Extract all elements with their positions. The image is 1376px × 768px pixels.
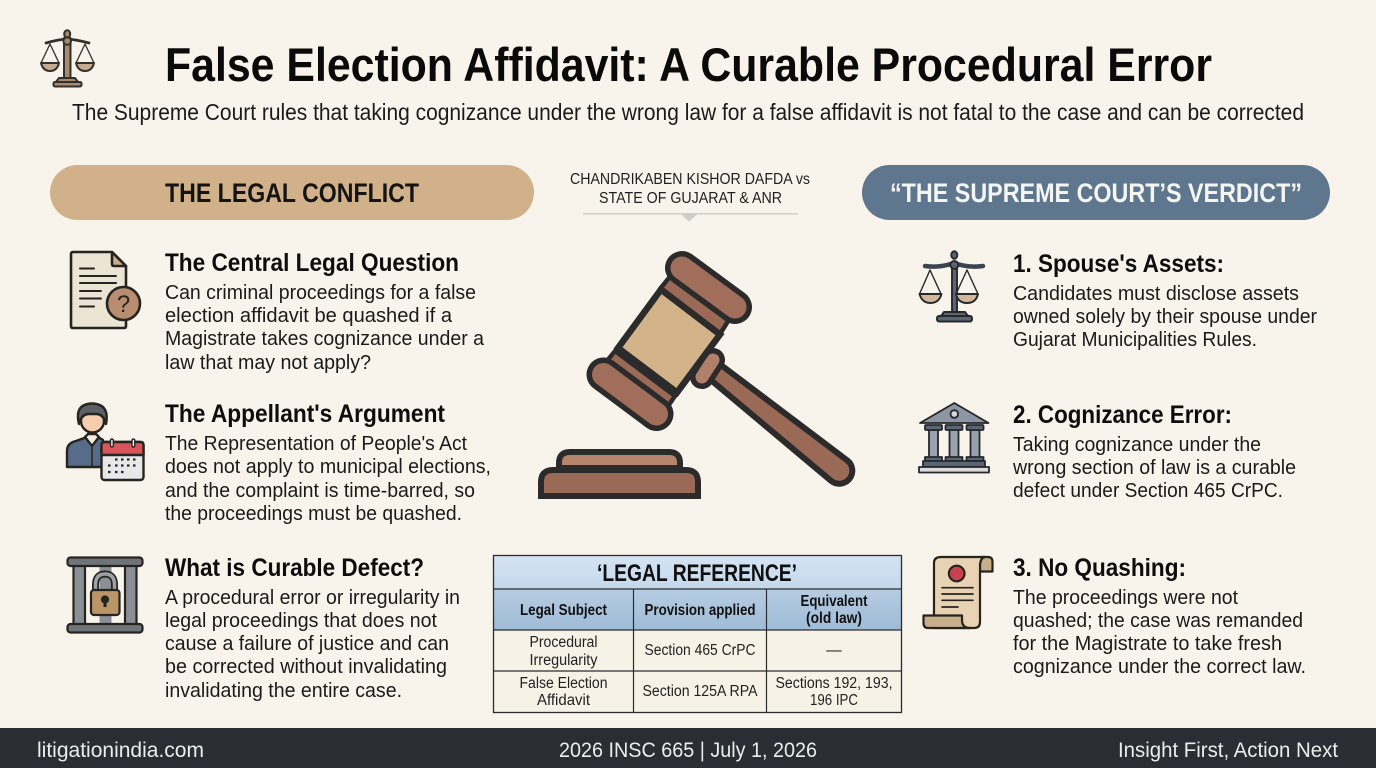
panel: right column xyxy=(919,250,1317,678)
table row: procedural irregularity: Irregularity xyxy=(530,652,598,669)
text: cognizance error: 2. Cognizance Error: xyxy=(1013,401,1232,429)
table row: false election affidavit: Affidavit xyxy=(537,692,591,709)
table row: procedural irregularity: Section 465 CrPC xyxy=(644,642,756,659)
text: what is curable defect: be corrected without invalidating xyxy=(165,656,447,678)
text: the appellant's argument: and the complaint is time-barred, so xyxy=(165,480,475,502)
footer bar xyxy=(0,728,1376,768)
case name xyxy=(570,171,810,222)
table header row xyxy=(520,593,868,627)
table header row: Provision applied xyxy=(644,602,756,619)
sound block xyxy=(559,452,680,468)
table row: procedural irregularity: Procedural xyxy=(530,634,598,651)
text: the appellant's argument: does not apply to municipal elections, xyxy=(165,456,491,478)
icon: court building xyxy=(919,403,989,472)
text: no quashing: cognizance under the correct law. xyxy=(1013,656,1306,678)
text: what is curable defect: invalidating the entire case. xyxy=(165,680,402,702)
table row: false election affidavit: 196 IPC xyxy=(810,692,858,709)
panel heading: the supreme court's verdict: “THE SUPREME COURT’S VERDICT” xyxy=(890,178,1302,208)
icon: document with question mark xyxy=(71,252,140,328)
collar xyxy=(702,360,713,377)
icon: header scales xyxy=(41,30,94,86)
text: cognizance error xyxy=(1012,401,1296,502)
table row: false election affidavit xyxy=(520,675,892,709)
text: spouse's assets: Gujarat Municipalities Rules. xyxy=(1013,329,1257,351)
case name: STATE OF GUJARAT & ANR xyxy=(599,190,782,207)
text: cognizance error: wrong section of law is a curable xyxy=(1012,457,1296,479)
icon: document with question mark: ? xyxy=(117,291,130,318)
text: what is curable defect: legal proceedings that does not xyxy=(165,610,437,632)
text: what is curable defect xyxy=(165,554,460,702)
footer bar: litigationindia.com xyxy=(37,739,204,762)
text: cognizance error: Taking cognizance under the xyxy=(1013,434,1261,456)
text: the central legal question: Can criminal proceedings for a false xyxy=(165,282,476,304)
table header row: (old law) xyxy=(806,610,862,627)
text: the appellant's argument: the proceedings must be quashed. xyxy=(165,503,462,525)
title: False Election Affidavit: A Curable Procedural Error xyxy=(165,38,1212,91)
text: the appellant's argument: The Representation of People's Act xyxy=(165,433,467,455)
text: the central legal question: Magistrate takes cognizance under a xyxy=(165,328,485,350)
text: cognizance error: defect under Section 465 CrPC. xyxy=(1013,480,1283,502)
case name: CHANDRIKABEN KISHOR DAFDA vs xyxy=(570,171,810,188)
text: no quashing: quashed; the case was remanded xyxy=(1013,610,1303,632)
text: no quashing: The proceedings were not xyxy=(1013,587,1238,609)
icon: scales of justice xyxy=(920,251,983,322)
table row: procedural irregularity: — xyxy=(826,642,842,659)
text: spouse's assets xyxy=(1013,250,1317,351)
text: what is curable defect: cause a failure of justice and can xyxy=(165,633,449,655)
panel heading: the supreme court's verdict xyxy=(862,165,1330,220)
icon: person with calendar xyxy=(67,404,144,480)
necks xyxy=(660,274,730,334)
text: no quashing xyxy=(1013,554,1306,678)
text: the appellant's argument: The Appellant's Argument xyxy=(165,400,446,428)
head block xyxy=(618,290,720,392)
table: legal reference xyxy=(494,556,902,712)
footer bar: 2026 INSC 665 | July 1, 2026 xyxy=(559,739,817,762)
table header row: Legal Subject xyxy=(520,602,607,619)
table row: false election affidavit: False Election xyxy=(520,675,608,692)
caps xyxy=(682,268,735,307)
table header row: Equivalent xyxy=(800,593,868,610)
text: spouse's assets: Candidates must disclose assets xyxy=(1013,283,1299,305)
text: the central legal question xyxy=(165,249,485,374)
text: what is curable defect: What is Curable Defect? xyxy=(165,554,424,582)
table row: false election affidavit: Sections 192, 193, xyxy=(776,675,892,692)
text: no quashing: 3. No Quashing: xyxy=(1013,554,1186,582)
icon: gavel xyxy=(541,268,852,496)
icon: scroll with seal xyxy=(924,557,992,628)
text: the appellant's argument xyxy=(165,400,491,525)
panel: left column xyxy=(67,249,491,702)
text: the central legal question: The Central Legal Question xyxy=(165,249,459,277)
text: no quashing: for the Magistrate to take fresh xyxy=(1013,633,1282,655)
text: what is curable defect: A procedural error or irregularity in xyxy=(165,587,460,609)
text: spouse's assets: owned solely by their spouse under xyxy=(1013,306,1317,328)
table title: ‘LEGAL REFERENCE’ xyxy=(597,560,797,587)
table row: procedural irregularity xyxy=(530,634,842,669)
text: the central legal question: election affidavit be quashed if a xyxy=(165,305,453,327)
text: the central legal question: law that may not apply? xyxy=(165,352,371,374)
handle xyxy=(708,364,852,484)
panel heading: the legal conflict: THE LEGAL CONFLICT xyxy=(165,178,419,208)
icon: lock on prison bars xyxy=(68,558,142,632)
panel heading: the legal conflict xyxy=(50,165,534,220)
footer bar: Insight First, Action Next xyxy=(1118,739,1338,762)
table row: false election affidavit: Section 125A RPA xyxy=(642,683,758,700)
text: spouse's assets: 1. Spouse's Assets: xyxy=(1013,250,1224,278)
